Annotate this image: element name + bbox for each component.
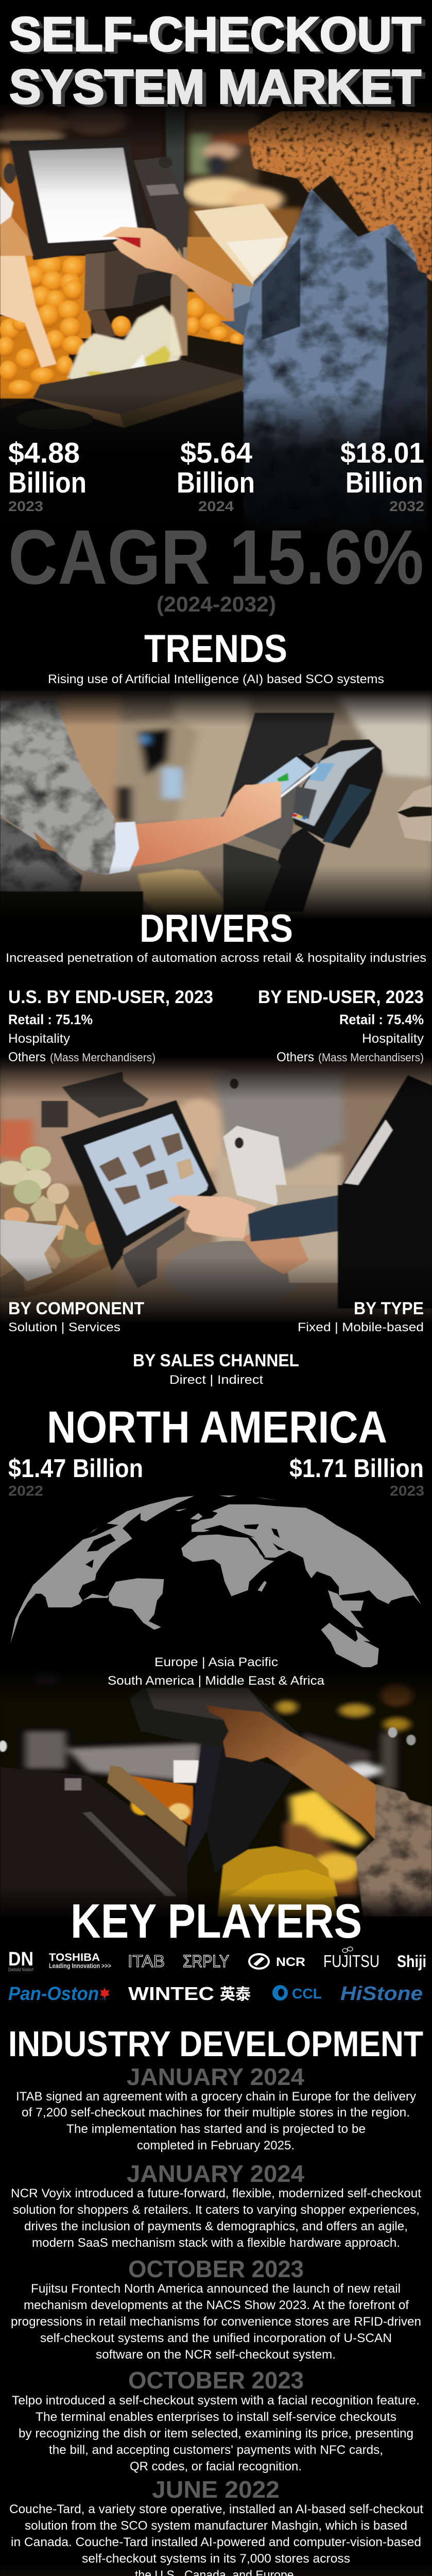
segment: global by end-user: (Mass Merchandisers) [318, 1051, 424, 1064]
logo: Pan-Oston: Pan-Oston [8, 1983, 99, 2004]
segment: U.S. by end-user: U.S. BY END-USER, 2023 [8, 987, 213, 1007]
africa [181, 1534, 274, 1596]
logo: CCL [272, 1985, 322, 2002]
receipt printer [134, 157, 189, 247]
logo: Wintec: WINTEC [128, 1983, 214, 2004]
backdrop behind arm [187, 237, 253, 289]
development: January 2024 ITAB: completed in February 2025. [137, 2139, 295, 2153]
CAGR figure: (2024-2032) [157, 592, 276, 616]
development: January 2024 ITAB: of 7,200 self-checkout machines for their multiple stores in the region. [22, 2106, 410, 2120]
logo: Wintec [128, 1983, 251, 2004]
denim jacket [240, 189, 427, 532]
segment: by component: Solution | Services [8, 1320, 120, 1334]
shirt cuff [109, 822, 139, 874]
trends heading and text: TRENDS [144, 627, 287, 671]
segment: by component [8, 1299, 144, 1334]
perforated scanner [62, 1072, 149, 1118]
segment: global by end-user: Others [277, 1050, 314, 1064]
trends heading and text: Rising use of Artificial Intelligence (AI) based SCO systems [48, 672, 384, 686]
title: SYSTEM MARKET [11, 61, 423, 115]
segment: U.S. by end-user: Hospitality [8, 1031, 71, 1046]
development: October 2023 Fujitsu: software on the NCR self-checkout system. [96, 2348, 336, 2362]
title [9, 7, 425, 116]
logo: Erply: ΣRPLY [183, 1952, 229, 1971]
segment: U.S. by end-user: Retail : 75.1% [8, 1012, 93, 1027]
eurasia [192, 1504, 422, 1605]
development: October 2023 Fujitsu: self-checkout systems and the unified incorporation of U-SCAN [40, 2331, 392, 2345]
logo: Fujitsu: FUJITSU [323, 1952, 379, 1971]
segment: global by end-user: Hospitality [362, 1031, 424, 1046]
segment: global by end-user [258, 987, 424, 1064]
development: January 2024 NCR: modern SaaS mechanism stack with a flexible hardware approach. [32, 2236, 400, 2250]
development: June 2022: self-checkout systems in its 7,000 stores across [82, 2552, 350, 2566]
segment: by sales channel [133, 1351, 299, 1387]
logo: Toshiba [49, 1952, 111, 1970]
holding hand [243, 1220, 308, 1274]
title: SYSTEM MARKET [9, 60, 421, 113]
development: October 2023 Telpo: OCTOBER 2023 [128, 2367, 304, 2394]
logos row one [8, 1947, 426, 1972]
north america stat 2022 [8, 1454, 143, 1499]
photo: customer at self-checkout scale with oranges [0, 0, 432, 541]
bananas [218, 1846, 337, 1917]
trends heading and text [48, 627, 384, 686]
arm and hand [102, 227, 234, 324]
monitor stand [123, 1216, 185, 1288]
logo: CCL: CCL [292, 1986, 322, 2002]
checkout base [0, 392, 244, 532]
logo: ITAB: ITAB [128, 1952, 165, 1971]
segment: by component: BY COMPONENT [8, 1299, 144, 1318]
development: October 2023 Telpo [12, 2367, 420, 2473]
development: January 2024 ITAB: The implementation has started and is projected to be [66, 2122, 366, 2136]
apples [0, 1146, 69, 1204]
pears [4, 1195, 108, 1269]
photo: finger pointing at scanner with bananas [0, 1667, 432, 1922]
development: June 2022: JUNE 2022 [152, 2476, 280, 2503]
stat: 2024 [177, 436, 255, 514]
south america [109, 1578, 164, 1630]
dark fixture left [0, 1767, 187, 1917]
grocery bag [138, 869, 229, 913]
monitor bezel [61, 1100, 218, 1271]
card terminal [292, 739, 383, 849]
stat: 2032: 2032 [389, 498, 424, 514]
regions list: Europe | Asia Pacific [154, 1655, 278, 1669]
cup holder [397, 785, 432, 841]
logo: Fujitsu [323, 1947, 379, 1971]
stat: 2024: $5.64 [180, 436, 252, 469]
plastic bag with bananas [67, 305, 182, 395]
north america heading: NORTH AMERICA [47, 1402, 387, 1452]
stat: 2032: $18.01 [340, 436, 424, 469]
development: October 2023 Fujitsu [11, 2256, 421, 2362]
sleeve [355, 1784, 432, 1917]
stat: 2024: Billion [177, 466, 255, 499]
arm with hand [132, 782, 281, 867]
suit sleeve [0, 701, 116, 875]
title: SYSTEM MARKET [13, 62, 425, 116]
development: January 2024 ITAB [16, 2063, 416, 2153]
logo: Wintec: 英泰 [220, 1986, 251, 2003]
development: October 2023 Telpo: QR codes, or facial recognition. [130, 2460, 302, 2473]
segment: by type: Fixed | Mobile-based [298, 1320, 424, 1334]
segment: by type: BY TYPE [354, 1299, 424, 1318]
development: January 2024 NCR: NCR Voyix introduced a future-forward, flexible, modernized self-checkout [11, 2187, 421, 2200]
development: October 2023 Telpo: by recognizing the dish or item selected, examining its price, presenting [19, 2427, 413, 2441]
pale bag strip [0, 237, 57, 367]
photo: red self-checkout kiosks [0, 2561, 432, 2576]
development: June 2022 [9, 2476, 423, 2576]
pile of oranges [0, 256, 244, 398]
segment: by sales channel: Direct | Indirect [169, 1373, 263, 1387]
development: October 2023 Telpo: the bill, and accepting customers' payments with NFC cards, [49, 2443, 383, 2457]
title: SELF-CHECKOUT [13, 9, 425, 63]
weighing platform [33, 360, 244, 428]
monitor screen [84, 1114, 208, 1235]
development: January 2024 NCR: JANUARY 2024 [127, 2160, 304, 2187]
segment: global by end-user: Retail : 75.4% [339, 1012, 424, 1027]
stat: 2023: Billion [8, 466, 87, 499]
development: January 2024 ITAB: JANUARY 2024 [127, 2063, 304, 2090]
pointing hand and arm [206, 1705, 376, 1839]
segment: by type [298, 1299, 424, 1334]
title: SELF-CHECKOUT [11, 8, 423, 62]
logo: Shiji: Shiji [397, 1952, 426, 1971]
posts [187, 1745, 223, 1865]
development: January 2024 NCR: solution for shoppers & retailers. It caters to varying shopper experiences, [13, 2203, 420, 2217]
key players heading: KEY PLAYERS [71, 1894, 362, 1948]
development: January 2024 ITAB: ITAB signed an agreement with a grocery chain in Europe for the delivery [16, 2090, 416, 2104]
world map globe [10, 1496, 422, 1669]
logo: HiStone: HiStone [340, 1983, 423, 2005]
monitor [10, 138, 150, 260]
clipboard [194, 204, 288, 287]
stat: 2023 [8, 436, 87, 514]
development: June 2022: Couche-Tard, a variety store operative, installed an AI-based self-checkout [9, 2502, 423, 2516]
left sleeve [0, 187, 14, 225]
segment: U.S. by end-user: (Mass Merchandisers) [50, 1051, 155, 1064]
north america stat 2022: $1.47 Billion [8, 1454, 143, 1483]
drivers heading and text: DRIVERS [140, 907, 293, 951]
logos row two [8, 1983, 423, 2005]
development: January 2024 NCR [11, 2160, 421, 2250]
north america stat 2023 [289, 1454, 424, 1499]
dark hanging box [41, 1101, 68, 1127]
wooden crate edge [0, 1247, 124, 1298]
white paper rolls [223, 1126, 286, 1206]
southeast asia islands [328, 1590, 364, 1628]
scale post [84, 252, 108, 311]
denim cuff [248, 1195, 337, 1242]
development: October 2023 Telpo: Telpo introduced a self-checkout system with a facial recognition feature. [12, 2394, 420, 2408]
logo: Toshiba: TOSHIBA [49, 1952, 100, 1963]
logo: NCR: NCR [276, 1955, 305, 1969]
title: SELF-CHECKOUT [9, 7, 421, 61]
segment: by sales channel: BY SALES CHANNEL [133, 1351, 299, 1370]
segment: global by end-user: BY END-USER, 2023 [258, 987, 424, 1007]
drivers heading and text [6, 907, 426, 965]
gloved pointing hand [167, 1195, 256, 1238]
scale dish [165, 1241, 303, 1306]
segment: U.S. by end-user: Others [8, 1050, 46, 1064]
orange crate [110, 1769, 193, 1827]
kiosk screen [224, 713, 335, 814]
logo: Diebold Nixdorf: DN [8, 1948, 33, 1970]
north america stat 2022: 2022 [8, 1483, 43, 1499]
regions list [108, 1655, 325, 1688]
australia [321, 1623, 379, 1669]
segment: U.S. by end-user [8, 987, 213, 1064]
development: October 2023 Telpo: The terminal enables enterprises to install self-service checkouts [36, 2410, 396, 2424]
north america and greenland [10, 1496, 194, 1643]
photo: touchscreen with gloved hand and pears [0, 1056, 432, 1385]
screen device [129, 1688, 300, 1748]
logo: NCR [249, 1954, 305, 1969]
black crate [187, 335, 244, 369]
logo: Diebold Nixdorf: Diebold Nixdorf [8, 1967, 33, 1972]
north america stat 2023: 2023 [390, 1483, 424, 1499]
regions list: South America | Middle East & Africa [108, 1674, 325, 1688]
plastic bag [0, 1219, 63, 1281]
drivers heading and text: Increased penetration of automation across retail & hospitality industries [6, 951, 426, 965]
black clothing [337, 1075, 432, 1309]
development: October 2023 Fujitsu: OCTOBER 2023 [128, 2256, 304, 2282]
logo: Toshiba: Leading Innovation >>> [49, 1962, 111, 1970]
stat: 2023: $4.88 [8, 436, 80, 469]
stat: 2023: 2023 [8, 498, 43, 514]
photo: phone payment at terminal [0, 688, 432, 950]
hair [248, 110, 432, 282]
development: June 2022: in Canada. Couche-Tard installed AI-powered and computer-vision-based [11, 2535, 421, 2549]
stat: 2024: 2024 [198, 498, 234, 514]
development: October 2023 Fujitsu: Fujitsu Frontech North America announced the launch of new retail [31, 2282, 401, 2296]
phone [240, 754, 317, 802]
development: October 2023 Fujitsu: mechanism developments at the NACS Show 2023. At the forefront of [24, 2298, 409, 2312]
development: June 2022: solution from the SCO system manufacturer Mashgin, which is based [25, 2519, 407, 2533]
market size stats [8, 436, 424, 514]
development: January 2024 NCR: drives the inclusion of payments & demographics, and offers an agile, [24, 2219, 408, 2233]
development: October 2023 Fujitsu: progressions in retail mechanisms for convenience stores are RFID-driven [11, 2315, 421, 2329]
stat: 2032 [340, 436, 424, 514]
logo: Pan-Oston: LTD [100, 1998, 107, 2001]
